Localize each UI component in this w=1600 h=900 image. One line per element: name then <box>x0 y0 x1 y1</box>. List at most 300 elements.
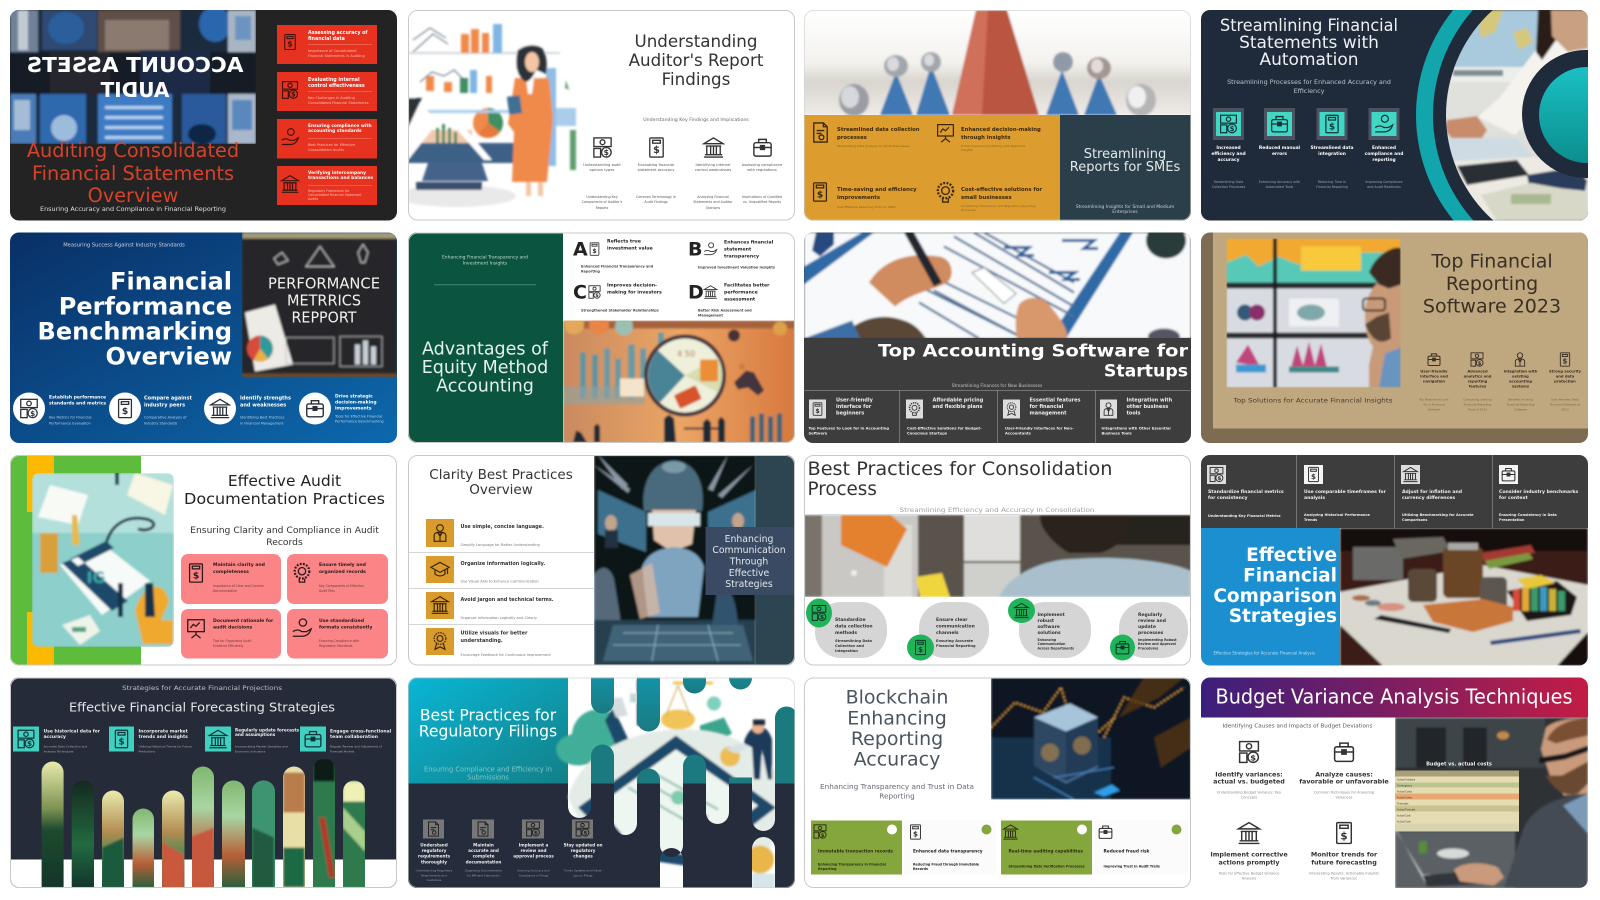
benefit D <box>688 282 770 318</box>
chalkboard lettering: REPPORT <box>292 308 357 326</box>
tip: benchmarks: Presentation <box>1499 518 1525 522</box>
step: review: processes <box>1138 630 1164 636</box>
teal rising strips <box>591 706 798 808</box>
card: evaluating controls: control effectiveness <box>308 83 365 89</box>
strategy: market trends <box>109 726 192 754</box>
card: reduced fraud: Reduced fraud risk <box>1104 848 1150 854</box>
feature: security: 2023 <box>1561 408 1569 412</box>
benefit A: A <box>573 238 588 260</box>
feature: integration: other business <box>1126 404 1168 410</box>
practice: utilize visuals <box>426 628 551 657</box>
subtitle: Ensuring Clarity and Compliance in Audit <box>190 525 379 536</box>
title: Financial <box>110 268 232 296</box>
feature: regulatory compliance: with regulations <box>747 168 777 172</box>
title <box>27 142 238 202</box>
title: Understanding <box>635 31 757 51</box>
title: Top Accounting Software for <box>878 342 1189 362</box>
metric: strategic decisions: decision-making <box>335 400 377 406</box>
step: software: Implement <box>1038 612 1066 618</box>
item: decision making: Enhancing Decision-Making with Real-Time <box>961 144 1025 148</box>
requirement: maintain: documentation <box>466 860 501 864</box>
tip: timeframes: Use comparable timeframes for <box>1304 489 1387 495</box>
item: data collection: processes <box>837 135 867 141</box>
feature: statement accuracy: statement accuracy <box>638 168 675 172</box>
technique: analyze causes: Analyze causes: <box>1315 770 1373 778</box>
benefit B: statement <box>724 246 752 252</box>
step: communication: Ensure clear <box>936 617 968 623</box>
requirement: understand: thoroughly <box>421 860 447 864</box>
tip: benchmarks: Ensuring Consistency in Data <box>1499 513 1557 517</box>
panel: blockchain enhancing reporting accuracy <box>804 678 1191 888</box>
card: rationale: Document rationale for <box>213 618 274 624</box>
title <box>629 31 764 89</box>
panel: top accounting software for startups <box>804 222 1191 443</box>
card: immutable records <box>811 820 902 874</box>
step: reduced errors: Reduced manual <box>1259 145 1301 151</box>
panel: best practices for regulatory filings <box>408 658 798 888</box>
technique: corrective actions: Implement corrective <box>1210 850 1288 858</box>
benefit A: Reporting <box>581 270 601 274</box>
metric: performance standards: Performance Evaluation <box>49 422 91 426</box>
step: data integration <box>1311 108 1353 189</box>
feature: audit opinions: opinion types <box>590 168 615 172</box>
panel: effective financial comparison strategies <box>1201 455 1588 666</box>
step: data integration: Streamlined data <box>1311 145 1353 151</box>
title: Accuracy <box>854 748 940 770</box>
title: Blockchain <box>846 686 948 708</box>
title: Statements with <box>1239 33 1379 53</box>
card: ensuring compliance <box>277 119 377 158</box>
card: data transparency: Records <box>913 867 928 871</box>
item: data collection: Streamlining Data Analysis for Small Businesses <box>837 144 910 148</box>
technique: monitor trends: Interpreting Results: Actionable Insights <box>1309 872 1379 876</box>
feature: integration: Integrations with Other Essential <box>1102 426 1171 430</box>
item: cost effective: small businesses <box>961 195 1012 201</box>
feature: pricing <box>906 398 984 436</box>
panel: top financial reporting software 2023 <box>1201 232 1588 443</box>
item: cost effective: Processes <box>961 208 976 212</box>
technique: analyze causes: favorable or unfavorable <box>1299 778 1389 786</box>
tip: benchmarks: Consider industry benchmarks <box>1499 489 1578 495</box>
requirement: stay updated: ups on Filings <box>573 874 593 878</box>
strategy: regular updates: Regularly update forecasts <box>235 728 299 732</box>
green side block <box>10 455 141 666</box>
requirement: stay updated: regulatory <box>571 848 596 853</box>
feature: regulatory compliance: vs. Unqualified Reports <box>743 200 781 204</box>
title <box>419 706 557 740</box>
step: review: update <box>1138 624 1156 630</box>
benefit D: Better Risk Assessment and <box>698 308 752 312</box>
step: standardize: Standardize <box>835 617 866 623</box>
item: data collection <box>814 123 920 148</box>
panel: streamlining financial statements <box>1201 10 1588 220</box>
card: reduced fraud: Improving Trust in Audit Trails <box>1104 864 1160 868</box>
step: software: Enhancing <box>1038 638 1057 642</box>
title: Best Practices for <box>420 706 557 724</box>
title: Accounting <box>436 376 534 396</box>
strategy: team collaboration <box>300 726 392 754</box>
title <box>1213 545 1337 627</box>
card: timely <box>287 554 388 604</box>
subtitle: Investment Insights <box>463 260 508 266</box>
navy lower strips <box>568 784 795 888</box>
card: clarity: Maintain clarity and <box>213 562 265 568</box>
card: data transparency: Reducing Fraud through Immutable <box>913 862 980 866</box>
strategy: regular updates <box>205 726 299 754</box>
title: Effective <box>1246 545 1337 566</box>
metric: industry peers: Industry Standards <box>144 422 177 426</box>
feature: interface: Top Features to Look <box>1418 398 1449 402</box>
panel: auditing consolidated financial statements <box>10 6 397 220</box>
dark circle <box>1522 50 1588 178</box>
item: decision making: through insights <box>961 135 1011 141</box>
illustration: documents <box>32 471 174 647</box>
metric: performance standards: Establish performance <box>49 394 106 400</box>
card: rationale: Evidence Efficiently <box>213 644 244 648</box>
feature: internal controls: Identifying internal <box>696 163 730 167</box>
subtitle: Reporting <box>879 792 915 800</box>
feature: pricing: Conscious Startups <box>907 432 948 436</box>
requirement: review: approval process <box>513 854 554 858</box>
strategy: team collaboration: Engage cross-functional <box>330 728 392 734</box>
strategy: team collaboration: Regular Review and Adjustment of <box>330 744 383 748</box>
metric: strengths: Identifying Best Practices <box>240 416 285 420</box>
step: increased efficiency: Collection Processes <box>1212 185 1246 189</box>
technique: corrective actions: Analysis <box>1242 876 1256 880</box>
illustration: analyst with charts <box>409 22 578 208</box>
practice: utilize visuals: Encourage Feedback for Continuous Improvement <box>460 653 551 657</box>
title <box>1070 147 1180 175</box>
step: software: robust <box>1038 618 1055 624</box>
technique: identify variances: Concepts <box>1241 796 1257 800</box>
tip: timeframes: Trends <box>1304 518 1317 522</box>
title: Overview <box>88 184 178 207</box>
callout text: Effective <box>729 568 770 579</box>
requirement: stay updated: Timely Updates and Follow- <box>563 868 602 872</box>
title: Equity Method <box>422 358 548 378</box>
teal hanging strips <box>591 658 752 732</box>
card: evaluating controls: Key Challenges in Auditing <box>308 96 355 100</box>
practice: simple language: Simplify Language for Better Understanding <box>460 543 540 547</box>
card: immutable records: Reporting <box>818 867 837 871</box>
technique: monitor trends <box>1309 823 1379 880</box>
benefit D: Management <box>698 314 723 318</box>
card: verifying intercompany: Audits <box>308 197 318 201</box>
chart: budget vs actual table: Actual Costs <box>1397 796 1413 800</box>
subtitle <box>820 782 974 800</box>
technique: analyze causes: Common Techniques for Analyzing <box>1314 790 1374 794</box>
subtitle: Enterprises <box>1112 209 1138 215</box>
card: assessing accuracy <box>277 25 377 64</box>
photo: chalkboard <box>242 232 397 378</box>
feature: pricing: Affordable pricing <box>932 398 984 404</box>
metric: strengths: Identify strengths <box>240 396 291 402</box>
title: Documentation Practices <box>184 490 385 508</box>
card: clarity <box>181 554 281 604</box>
card: timely: organized records <box>319 569 366 575</box>
subtitle <box>190 525 379 548</box>
practice: organize logically: Organize information logically. <box>460 561 545 567</box>
white floor strip <box>10 860 397 888</box>
technique: analyze causes: Variances <box>1336 796 1353 800</box>
title: Streamlining <box>1084 147 1166 162</box>
tip: inflation <box>1401 465 1474 522</box>
photo: notes on board <box>805 515 1190 597</box>
tip: standardize: for consistency <box>1208 495 1248 501</box>
title: Financial Statements <box>32 162 234 185</box>
card: rationale: audit decisions <box>213 624 252 630</box>
item: decision making: Insights <box>961 148 973 152</box>
practice: organize logically: Use Visual Aids to Enhance Communication <box>460 580 539 584</box>
step: reduced errors: Automated Tools <box>1266 185 1294 189</box>
item: decision making: Enhanced decision-making <box>961 127 1041 133</box>
item: cost effective: Cost-effective solutions for <box>961 187 1042 193</box>
title: Findings <box>662 69 730 89</box>
feature: analytics: Tools of 2023 <box>1467 408 1487 412</box>
step: data integration: integration <box>1318 151 1346 157</box>
feature: pricing: Cost-Effective Solutions for Budget- <box>907 426 982 430</box>
title: Regulatory Filings <box>419 722 557 740</box>
subtitle: Efficiency <box>1294 87 1325 95</box>
photo: coins and jars <box>1340 528 1588 666</box>
title <box>846 686 948 770</box>
card: standards: Regulatory Standards <box>319 644 353 648</box>
subtitle <box>1228 80 1390 94</box>
step: compliance: and Audit Readiness <box>1367 185 1401 189</box>
step: communication <box>907 602 989 660</box>
arched illustration columns <box>38 756 367 888</box>
step: standardize: methods <box>835 630 857 636</box>
step: software: Across Departments <box>1038 646 1074 650</box>
feature: analytics <box>1463 353 1492 412</box>
benefit C: Improves decision- <box>607 282 657 288</box>
title <box>1423 250 1561 318</box>
feature: statement accuracy: Common Terminology in <box>636 195 676 199</box>
title <box>429 467 573 498</box>
technique: identify variances: Identify variances: <box>1215 770 1283 778</box>
mirrored photo headline <box>28 56 244 98</box>
card: verifying intercompany: transactions and balances <box>308 175 373 181</box>
technique: identify variances: Understanding Budget Variance: Key <box>1217 790 1281 794</box>
feature: user friendly: interface for <box>836 404 872 410</box>
callout text: Through <box>729 556 768 568</box>
step: standardize: data collection <box>835 624 873 630</box>
card: evaluating controls: Evaluating internal <box>308 77 360 83</box>
feature: regulatory compliance: Implications of Qualified <box>742 195 782 199</box>
teal title block <box>408 678 568 784</box>
card: rationale: Tips for Organizing Audit <box>212 639 252 643</box>
step: increased efficiency <box>1211 108 1246 189</box>
panel: clarity best practices overview <box>408 455 795 666</box>
strategy: historical data: accuracy <box>44 734 66 740</box>
metric: strategic decisions: Drive strategic <box>335 394 373 400</box>
callout box <box>706 527 795 595</box>
illustration: documents: IG <box>86 568 106 587</box>
feature: security: Strong security <box>1549 370 1582 374</box>
panel: effective audit documentation practices <box>10 455 397 666</box>
feature: analytics: analytics and <box>1464 374 1492 378</box>
item: time saving: Time-saving and efficiency <box>837 187 917 193</box>
photo: hands on blueprint <box>804 232 1191 338</box>
blue panel <box>1201 528 1340 666</box>
strategy: market trends: Utilizing Historical Trends for Future <box>138 744 192 748</box>
feature: essentials: Accountants <box>1005 432 1032 436</box>
decorative teal ring <box>1416 10 1588 220</box>
feature: analytics: Financial Reporting <box>1464 402 1491 406</box>
benefit D: D <box>688 282 704 304</box>
title: Clarity Best Practices <box>429 467 573 483</box>
practice: avoid jargon: Avoid jargon and technical terms. <box>460 597 554 603</box>
subtitle: Enhancing Financial Transparency and <box>442 254 528 260</box>
card: verifying intercompany: Consolidated Financial Statement <box>308 193 362 197</box>
yellow bar bottom <box>27 612 54 666</box>
mirrored photo headline: ACCOUNT ASSETS <box>27 53 243 77</box>
subtitle: Streamlining Insights for Small and Medium <box>1076 204 1174 210</box>
feature: regulatory compliance: Assessing compliance <box>742 163 783 167</box>
feature: audit opinions: Understanding audit <box>583 163 621 167</box>
panel: understanding auditor's report findings <box>396 10 795 220</box>
feature: user friendly: Software <box>808 432 828 436</box>
card: standards: formats consistently <box>319 624 372 630</box>
strategy: market trends: trends and insights <box>138 734 188 740</box>
step: data integration: Reducing Time in <box>1318 180 1346 184</box>
card: standards: Use standardized <box>319 618 364 624</box>
tip: inflation: Adjust for inflation and <box>1402 489 1462 495</box>
card: verifying intercompany <box>277 166 377 205</box>
strategy: market trends: Predictions <box>138 750 155 754</box>
chart: budget vs actual table: Actual Analysis <box>1397 778 1416 782</box>
feature: audit opinions <box>582 138 623 210</box>
metric: performance standards: standards and metrics <box>49 400 106 406</box>
card: timely: Audit Files <box>319 589 335 593</box>
technique: monitor trends: Monitor trends for <box>1311 850 1378 858</box>
chart: budget vs actual table: Actual Costs <box>1397 790 1413 794</box>
feature: security <box>1549 353 1582 412</box>
card: timely: Ensure timely and <box>319 562 366 568</box>
title: Effective Audit <box>228 472 341 490</box>
subtitle: Streamlining Finances for New Businesses <box>952 383 1043 389</box>
strategy: market trends: Incorporate market <box>138 728 189 734</box>
feature: analytics: features <box>1469 384 1487 388</box>
feature: security: User Reviews: Best <box>1551 398 1580 402</box>
card: real-time auditing <box>1001 820 1092 874</box>
technique: monitor trends: future forecasting <box>1311 858 1377 866</box>
title <box>422 340 549 396</box>
feature: integration <box>1100 398 1173 436</box>
requirement: review: Ensuring Accuracy and <box>517 868 550 872</box>
item: cost effective <box>938 183 1042 212</box>
illustration: documents, scale and businessman <box>556 680 783 888</box>
step: compliance: compliance and <box>1365 151 1403 157</box>
step: communication: channels <box>936 630 959 636</box>
subtitle: Ensuring Compliance and Efficiency in <box>424 766 552 774</box>
title: Financial <box>1243 566 1337 586</box>
tan inner panel <box>1213 232 1588 428</box>
chart: budget vs actual table: Actual Cost <box>1397 814 1411 818</box>
tip: timeframes: Analyzing Historical Performance <box>1304 513 1370 517</box>
step: increased efficiency: Increased <box>1216 145 1241 151</box>
subtitle: Measuring Success Against Industry Standards <box>63 242 185 248</box>
feature: security: and data <box>1556 374 1575 378</box>
step: data integration: Financial Reporting <box>1316 185 1348 189</box>
feature: integration: accounting <box>1509 380 1532 384</box>
step: communication: Ensuring Accurate <box>936 639 974 643</box>
feature: essentials: management <box>1030 410 1067 416</box>
technique: analyze causes <box>1299 743 1389 800</box>
feature: internal controls: control weaknesses <box>695 168 731 172</box>
feature: security: Financial Software of <box>1550 402 1581 406</box>
strategy: historical data: Use historical data for <box>44 728 101 734</box>
chalkboard lettering: PERFORMANCE <box>268 274 380 292</box>
card: evaluating controls <box>277 72 377 111</box>
title: Budget Variance Analysis Techniques <box>1216 684 1572 708</box>
subtitle: Ensuring Accuracy and Compliance in Financial Reporting <box>40 207 226 213</box>
panel: best practices for consolidation process <box>804 455 1191 666</box>
feature: integration: Integration with <box>1504 370 1538 374</box>
tip: inflation: Utilizing Benchmarking for Accurate <box>1402 513 1474 517</box>
chart: budget vs actual table: Budget vs. actual costs <box>1426 762 1492 768</box>
step: review: Regularly <box>1138 612 1162 618</box>
feature: essentials <box>1003 398 1080 436</box>
tip: standardize: Understanding Key Financial Metrics <box>1208 514 1281 518</box>
technique: corrective actions <box>1210 823 1288 880</box>
step: compliance: Improving Compliance <box>1365 180 1403 184</box>
requirement: maintain: for Efficient Submission <box>467 874 500 878</box>
title <box>38 268 232 370</box>
practice: simple language <box>426 519 544 547</box>
benefit C: C <box>573 282 587 304</box>
card: real-time auditing: Streamlining Data Verification Processes <box>1008 864 1085 868</box>
callout text: Strategies <box>725 579 773 590</box>
step: software <box>1008 598 1091 658</box>
step: compliance <box>1365 108 1403 189</box>
subtitle: Strategies for Accurate Financial Projections <box>122 685 282 692</box>
card: real-time auditing: Real-time auditing capabilities <box>1008 848 1083 854</box>
feature: interface: User-friendly <box>1420 370 1448 374</box>
feature: integration: tools <box>1126 410 1140 416</box>
subtitle: Top Solutions for Accurate Financial Insights <box>1232 398 1392 404</box>
title <box>184 472 385 508</box>
requirement: maintain: accurate and <box>468 848 499 853</box>
benefit B: transparency <box>724 254 759 260</box>
photo: woman with visor <box>594 456 756 664</box>
title: Strategies <box>1229 606 1337 627</box>
card: data transparency: Enhanced data transparency <box>913 848 983 854</box>
benefit A <box>573 238 654 274</box>
step: communication: communication <box>936 624 975 630</box>
benefit A: investment value <box>607 246 653 252</box>
card: standards <box>287 609 388 658</box>
feature: integration: systems <box>1512 384 1530 388</box>
feature: audit opinions: Components of Auditor's <box>582 200 623 204</box>
item: time saving: Cost-Effective Reporting Tools for SMEs <box>837 205 896 209</box>
panel: effective financial forecasting strategies <box>10 678 397 888</box>
step: reduced errors: Enhancing Accuracy with <box>1259 180 1300 184</box>
step: review: Procedures <box>1138 646 1158 650</box>
title: Effective Financial Forecasting Strategies <box>69 700 335 714</box>
subtitle <box>424 766 552 782</box>
feature: audit opinions: Understanding Key <box>586 195 618 199</box>
subtitle: Understanding Key Findings and Implications <box>643 117 749 123</box>
feature: integration: Software <box>1514 408 1527 412</box>
benefit B: Improved Investment Valuation Insights <box>698 266 775 270</box>
card: assessing accuracy: Importance of Consolidated <box>308 49 356 53</box>
illustration: clock and analysts <box>563 320 795 443</box>
metric: strategic decisions: Performance Benchmarking <box>335 420 384 424</box>
benefit C <box>573 282 662 312</box>
metric: strengths <box>204 392 291 426</box>
title: Reporting <box>1446 273 1538 295</box>
